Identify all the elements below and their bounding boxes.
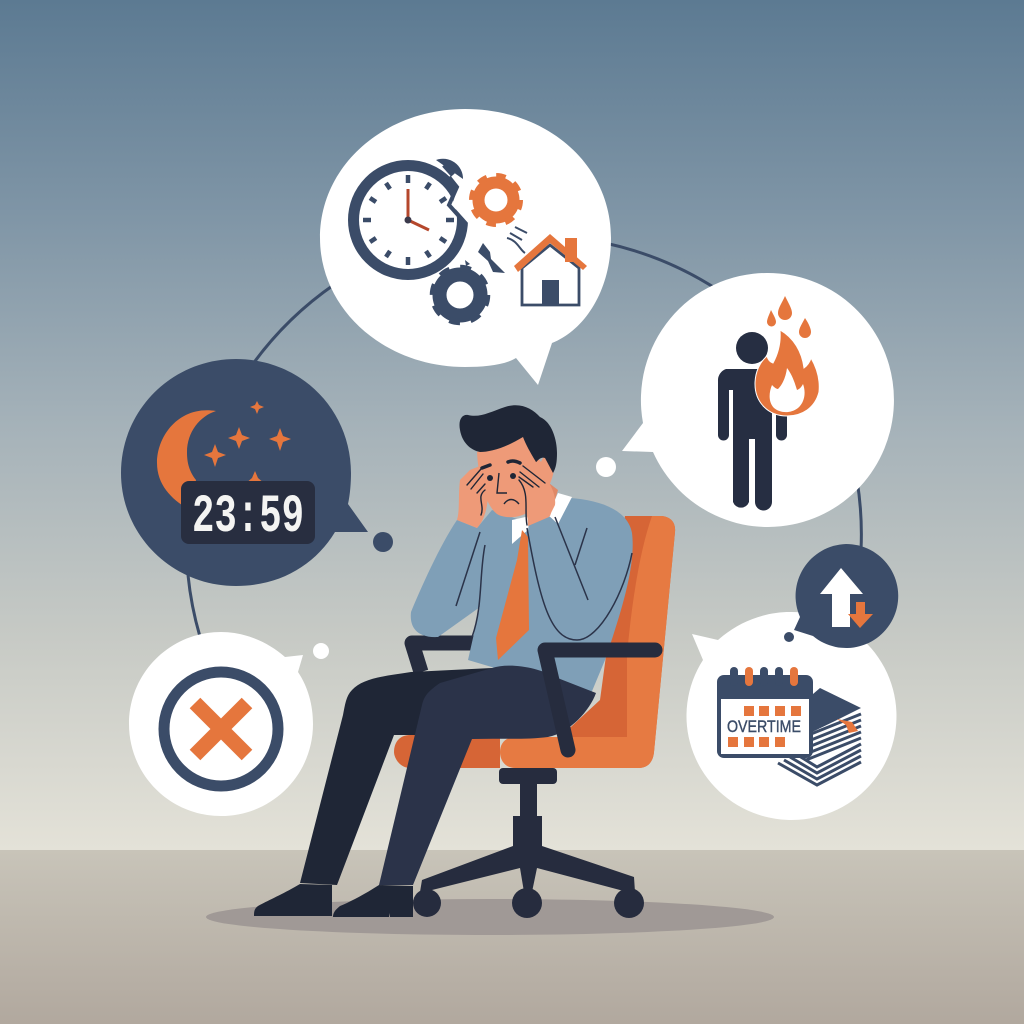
bubble shape xyxy=(121,359,368,586)
man in suit xyxy=(254,405,633,917)
front leg xyxy=(379,666,596,885)
icon: flame xyxy=(755,296,819,416)
right armrest xyxy=(545,650,655,750)
icon: gear shards xyxy=(465,243,505,273)
icon: broken clock xyxy=(354,159,490,274)
office chair xyxy=(394,516,675,918)
icon: white up arrow xyxy=(820,568,863,627)
hair xyxy=(459,405,557,473)
icon: orange down arrow xyxy=(848,602,873,628)
icon: stars xyxy=(204,401,291,484)
shirt fold lines xyxy=(456,517,632,640)
chair seat xyxy=(394,735,500,768)
neck shadow xyxy=(540,480,558,516)
bubble: up-down arrows xyxy=(794,544,898,648)
bubble: overtime xyxy=(686,612,896,820)
icon: person xyxy=(718,332,787,510)
face details xyxy=(482,461,520,504)
chair base xyxy=(413,768,644,918)
icon: overtime calendar: OVERTIME xyxy=(727,717,801,736)
bubble shape xyxy=(320,109,611,385)
right hand xyxy=(519,463,555,526)
finger lines xyxy=(467,466,545,525)
bubble: cancelled xyxy=(129,632,313,816)
icon: paper stack xyxy=(778,688,861,785)
bubble shape xyxy=(622,273,894,527)
digital clock display: 23:59 xyxy=(192,486,304,547)
chair back xyxy=(560,516,675,768)
necktie xyxy=(496,530,529,660)
back shoe xyxy=(254,884,332,916)
thought dot: late night xyxy=(373,532,393,552)
icon: orange gear xyxy=(472,176,520,224)
bubble: late night xyxy=(121,359,368,586)
floor xyxy=(0,850,1024,1024)
bubble shape xyxy=(686,612,896,820)
shirt collar xyxy=(512,493,572,544)
floor shadow xyxy=(206,899,774,935)
left hand xyxy=(457,466,488,528)
bubble shape xyxy=(794,544,898,648)
icon: moon xyxy=(157,410,216,510)
back leg xyxy=(300,668,500,885)
icon: stress squiggle xyxy=(507,227,527,253)
connecting ring arcs xyxy=(188,243,861,640)
bubble: work-life clock xyxy=(320,109,611,385)
icon: house xyxy=(514,234,587,305)
thought dot: burnout xyxy=(596,457,616,477)
torso and sleeves xyxy=(411,498,633,696)
icon: crossed circle xyxy=(164,672,278,786)
thought dot: overtime xyxy=(784,632,794,642)
bubble: burnout xyxy=(622,273,894,527)
thought dot: cancelled xyxy=(313,643,329,659)
head xyxy=(477,437,554,517)
icon: navy gear xyxy=(433,268,487,322)
icon: overtime calendar xyxy=(717,667,813,758)
bubble shape xyxy=(129,632,313,816)
front shoe xyxy=(333,885,413,917)
left armrest xyxy=(412,643,478,672)
